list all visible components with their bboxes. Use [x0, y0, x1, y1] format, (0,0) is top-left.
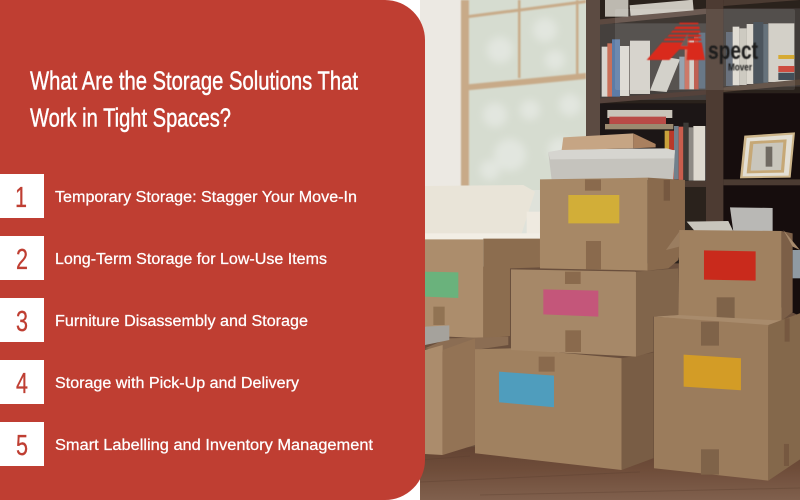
pink-label box: [511, 268, 678, 357]
silver object and magazine behind red box: [687, 207, 773, 231]
title: Work in Tight Spaces?: [30, 102, 231, 132]
list item 5: 5: [16, 430, 28, 462]
yellow-label box: [540, 178, 685, 271]
photo base: [420, 0, 800, 500]
large blue-label box: [475, 348, 653, 470]
logo: Aspect Mover: [647, 23, 759, 74]
list item 4: 4: [16, 368, 28, 400]
sofa: [425, 185, 542, 240]
dark backdrop between stacks: [425, 263, 800, 458]
list item 3: [0, 298, 308, 342]
photo: stacked moving boxes in a living room: [420, 0, 800, 500]
list item 1: 1: [15, 182, 27, 214]
shelf boards: [600, 8, 706, 25]
logo icon: red striped A: [647, 23, 705, 60]
books, upper right: [726, 22, 794, 86]
list item 2: 2: [16, 244, 28, 276]
bookshelf: [586, 0, 800, 328]
floor: [420, 440, 800, 500]
list item 3: 3: [16, 306, 28, 338]
window background: [420, 0, 587, 190]
cardboard boxes: [425, 133, 800, 481]
books, upper left: [602, 33, 705, 97]
list item 3: Furniture Disassembly and Storage: [55, 313, 308, 330]
list item 2: [0, 236, 327, 280]
woven basket: [562, 133, 656, 150]
panel: red content panel: [0, 0, 425, 500]
storage tub: [548, 148, 675, 180]
back left box: [425, 239, 540, 339]
window frame: [461, 0, 586, 186]
orange-label box: [654, 313, 800, 481]
logo wordmark: spect: [708, 37, 759, 65]
list item 1: Temporary Storage: Stagger Your Move-In: [55, 189, 357, 206]
list item 4: [0, 360, 299, 404]
list item 1: [0, 174, 357, 218]
logo backing: translucent light rectangle: [615, 9, 795, 90]
list item 2: Long-Term Storage for Low-Use Items: [55, 251, 327, 268]
logo sub-wordmark: Mover: [728, 62, 752, 74]
title: What Are the Storage Solutions That: [30, 66, 359, 96]
magazine stack near top: [630, 0, 694, 16]
list item 5: Smart Labelling and Inventory Management: [55, 437, 374, 454]
lower left box: [425, 325, 508, 455]
title: [30, 66, 359, 132]
list item 5: [0, 422, 374, 466]
list item 4: Storage with Pick-Up and Delivery: [55, 375, 299, 392]
books, lower left: [605, 110, 705, 181]
picture frame: [740, 132, 795, 178]
red-label box: [666, 230, 800, 321]
